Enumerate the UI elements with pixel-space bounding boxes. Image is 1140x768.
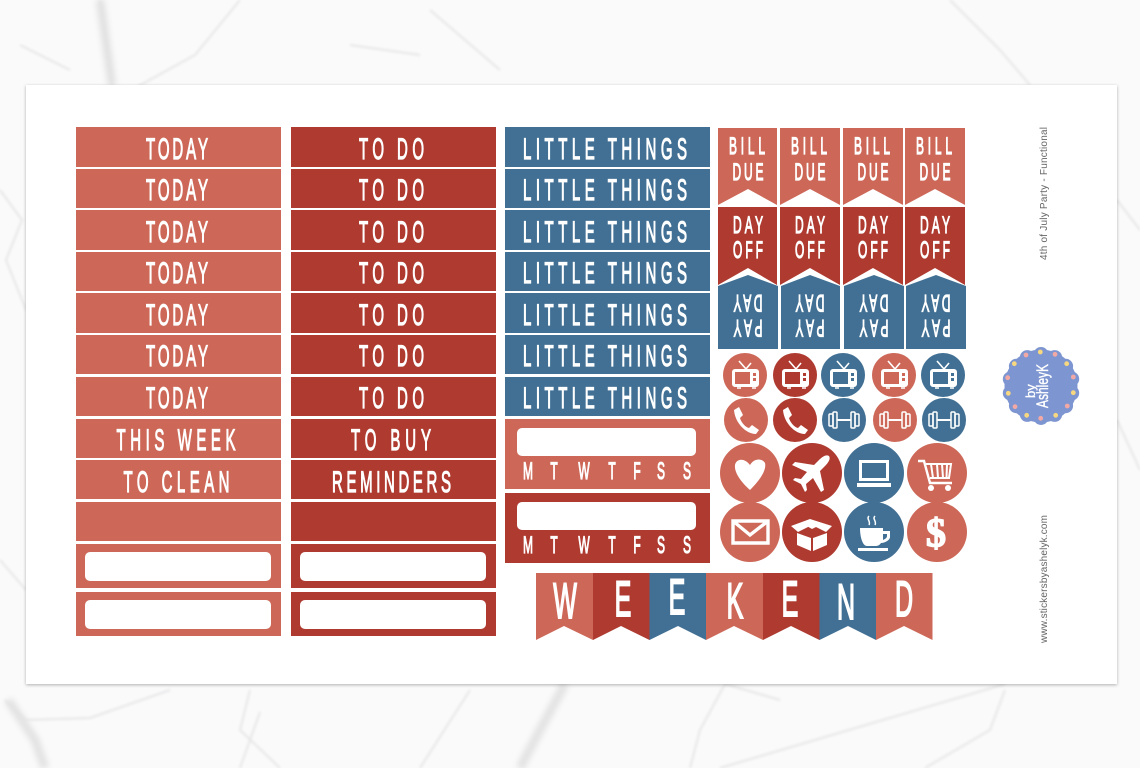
icon: shopping cart bbox=[907, 443, 967, 503]
sticker: TODAY 7: TODAY bbox=[146, 383, 208, 416]
sticker: TODAY 2: TODAY bbox=[146, 175, 208, 208]
flag: DAY OFF 1: DAY bbox=[733, 213, 763, 239]
flag: DAY OFF 1: OFF bbox=[733, 238, 763, 264]
flag: PAY DAY 3 (upside down): DAY bbox=[859, 289, 888, 315]
website URL, vertical: www.stickersbyashelyk.com bbox=[1039, 515, 1050, 644]
sticker: blank bbox=[76, 502, 281, 541]
sticker: TO CLEAN: TO CLEAN bbox=[123, 467, 230, 500]
pennant: K: K bbox=[727, 574, 743, 629]
weekday tracker: coral: T bbox=[550, 459, 558, 485]
weekday tracker: coral bbox=[505, 419, 710, 489]
weekday tracker: dark red: S bbox=[683, 533, 691, 559]
sticker: write-in box 2 bbox=[291, 592, 496, 636]
sticker: TO DO 7 bbox=[291, 377, 496, 416]
weekday tracker: coral: F bbox=[633, 459, 641, 485]
sticker: TODAY 4 bbox=[76, 252, 281, 291]
weekday tracker: dark red: M bbox=[523, 533, 533, 559]
sticker: TO DO 1 bbox=[291, 127, 496, 167]
pennant: D: D bbox=[895, 572, 913, 627]
flag: PAY DAY 3 (upside down) bbox=[844, 275, 904, 349]
flag: BILL DUE 2 bbox=[780, 128, 840, 205]
sticker: TO DO 1: TO DO bbox=[359, 134, 424, 167]
flag: PAY DAY 1 (upside down): PAY bbox=[733, 314, 762, 340]
flag: PAY DAY 2 (upside down): DAY bbox=[795, 289, 824, 315]
flag: PAY DAY 1 (upside down): DAY bbox=[733, 289, 762, 315]
sticker: TO DO 3 bbox=[291, 210, 496, 250]
pennant: E: E bbox=[615, 572, 631, 627]
sticker: THIS WEEK: THIS WEEK bbox=[116, 425, 236, 458]
sticker: TO DO 2: TO DO bbox=[359, 175, 424, 208]
sticker: LITTLE THINGS 5: LITTLE THINGS bbox=[523, 300, 687, 333]
icon: tv coral bbox=[872, 353, 916, 397]
sticker: TODAY 6: TODAY bbox=[146, 341, 208, 374]
sticker: REMINDERS bbox=[291, 460, 496, 500]
icon: envelope bbox=[720, 502, 780, 562]
sticker: write-in box 1 bbox=[291, 544, 496, 588]
pennant: W: W bbox=[553, 574, 577, 629]
flag: BILL DUE 1: DUE bbox=[732, 160, 764, 186]
weekday tracker: dark red: S bbox=[657, 533, 665, 559]
icon: tv blue bbox=[821, 353, 865, 397]
flag: BILL DUE 1 bbox=[718, 128, 777, 205]
sticker: LITTLE THINGS 1 bbox=[505, 127, 710, 167]
flag: PAY DAY 4 (upside down) bbox=[906, 275, 966, 349]
icon: dumbbell blue bbox=[822, 398, 866, 442]
sticker: REMINDERS: REMINDERS bbox=[332, 467, 451, 500]
column 3: blue header stickers and weekday trackers bbox=[505, 127, 710, 563]
pennant: E: E bbox=[669, 570, 685, 625]
sticker: TODAY 2 bbox=[76, 169, 281, 208]
weekday tracker: coral: S bbox=[683, 459, 691, 485]
sticker: LITTLE THINGS 2 bbox=[505, 169, 710, 208]
white sticker sheet bbox=[26, 85, 1117, 684]
badge: by AshleyK bbox=[1003, 347, 1079, 425]
sticker: LITTLE THINGS 3 bbox=[505, 210, 710, 250]
flag: BILL DUE 2: BILL bbox=[791, 134, 827, 160]
pennant: E bbox=[650, 570, 706, 640]
icon: dumbbell blue bbox=[922, 398, 966, 442]
sticker: LITTLE THINGS 4 bbox=[505, 252, 710, 291]
flag: PAY DAY 2 (upside down): PAY bbox=[795, 314, 824, 340]
flag: DAY OFF 1 bbox=[718, 207, 777, 285]
icon: tv blue bbox=[921, 353, 965, 397]
sticker: TO DO 6: TO DO bbox=[359, 341, 424, 374]
sticker: LITTLE THINGS 1: LITTLE THINGS bbox=[523, 134, 687, 167]
weekday tracker: coral: T bbox=[608, 459, 616, 485]
sticker: TODAY 5 bbox=[76, 293, 281, 333]
sheet title, vertical: 4th of July Party - Functional bbox=[1039, 127, 1050, 260]
sticker: blank bbox=[291, 502, 496, 541]
flag: DAY OFF 4 bbox=[905, 207, 965, 285]
flag: BILL DUE 3: BILL bbox=[854, 134, 890, 160]
flag: DAY OFF 2: DAY bbox=[795, 213, 825, 239]
flag: PAY DAY 4 (upside down): PAY bbox=[921, 314, 950, 340]
sticker: TO DO 6 bbox=[291, 335, 496, 374]
sticker: TO DO 7: TO DO bbox=[359, 383, 424, 416]
weekday tracker: coral: S bbox=[657, 459, 665, 485]
pennant: E bbox=[763, 572, 820, 640]
icon: tv dark red bbox=[773, 353, 817, 397]
weekday tracker: coral: M bbox=[523, 459, 533, 485]
sticker: TODAY 1: TODAY bbox=[146, 134, 208, 167]
sticker: LITTLE THINGS 6 bbox=[505, 335, 710, 374]
icon: dollar sign: $ bbox=[926, 510, 946, 555]
flag: DAY OFF 3: DAY bbox=[858, 213, 888, 239]
pennant: K bbox=[706, 573, 763, 640]
small circle icons bbox=[723, 353, 966, 442]
flag: DAY OFF 4: DAY bbox=[920, 213, 950, 239]
pennant: N bbox=[820, 573, 876, 640]
sticker: TODAY 6 bbox=[76, 335, 281, 374]
icon: coffee cup bbox=[844, 502, 904, 562]
flag: PAY DAY 4 (upside down): DAY bbox=[921, 289, 950, 315]
flag: PAY DAY 1 (upside down) bbox=[718, 275, 778, 349]
flag: PAY DAY 2 (upside down) bbox=[781, 275, 840, 349]
large circle icons bbox=[720, 443, 967, 562]
flag: DAY OFF 2 bbox=[780, 207, 840, 285]
sticker: TO DO 5 bbox=[291, 293, 496, 333]
sticker: LITTLE THINGS 5 bbox=[505, 293, 710, 333]
flag: BILL DUE 4: BILL bbox=[916, 134, 952, 160]
sticker: TO DO 4 bbox=[291, 252, 496, 291]
weekday tracker: dark red: W bbox=[578, 533, 590, 559]
sticker: LITTLE THINGS 7: LITTLE THINGS bbox=[523, 383, 687, 416]
sticker: TO DO 5: TO DO bbox=[359, 300, 424, 333]
sticker: write-in box 2 bbox=[76, 592, 281, 636]
flag: DAY OFF 3: OFF bbox=[858, 238, 888, 264]
flag: DAY OFF 2: OFF bbox=[795, 238, 825, 264]
weekday tracker: coral: W bbox=[578, 459, 590, 485]
pennant: E: E bbox=[782, 572, 798, 627]
sticker: TODAY 7 bbox=[76, 377, 281, 416]
icon: tv coral bbox=[723, 353, 767, 397]
sticker: LITTLE THINGS 2: LITTLE THINGS bbox=[523, 175, 687, 208]
sticker: LITTLE THINGS 4: LITTLE THINGS bbox=[523, 258, 687, 291]
weekday tracker: dark red: F bbox=[633, 533, 641, 559]
column 1: coral header stickers bbox=[76, 127, 281, 636]
sticker: TODAY 5: TODAY bbox=[146, 300, 208, 333]
icon: heart bbox=[720, 443, 780, 503]
flag: DAY OFF 4: OFF bbox=[920, 238, 950, 264]
flag: BILL DUE 1: BILL bbox=[729, 134, 765, 160]
flag: BILL DUE 4 bbox=[905, 128, 965, 205]
pennant: E bbox=[593, 572, 650, 640]
flag: BILL DUE 3: DUE bbox=[858, 160, 888, 186]
pennant: N: N bbox=[837, 575, 855, 630]
sticker: TO BUY bbox=[291, 419, 496, 458]
sticker: TO DO 4: TO DO bbox=[359, 258, 424, 291]
icon: dumbbell coral bbox=[873, 398, 917, 442]
sticker: TO DO 2 bbox=[291, 169, 496, 208]
flag: PAY DAY 3 (upside down): PAY bbox=[859, 314, 888, 340]
sticker: write-in box 1 bbox=[76, 544, 281, 588]
icon: dollar sign bbox=[907, 502, 967, 562]
flag: BILL DUE 3 bbox=[843, 128, 903, 205]
sticker: LITTLE THINGS 3: LITTLE THINGS bbox=[523, 217, 687, 250]
flag stickers: BILL DUE, DAY OFF, PAY DAY bbox=[718, 128, 966, 349]
icon: phone dark red bbox=[773, 398, 817, 442]
icon: phone coral bbox=[724, 398, 768, 442]
flag: BILL DUE 4: DUE bbox=[920, 160, 950, 186]
icon: laptop bbox=[844, 443, 904, 503]
sticker: LITTLE THINGS 6: LITTLE THINGS bbox=[523, 341, 687, 374]
sticker: LITTLE THINGS 7 bbox=[505, 377, 710, 416]
sticker: THIS WEEK bbox=[76, 419, 281, 458]
badge: by AshleyK: by bbox=[1023, 384, 1038, 398]
badge: by AshleyK: AshleyK bbox=[1033, 364, 1052, 408]
weekday tracker: dark red bbox=[505, 493, 710, 563]
pennant: D bbox=[876, 572, 932, 640]
sticker: TODAY 4: TODAY bbox=[146, 258, 208, 291]
sticker: TO CLEAN bbox=[76, 460, 281, 500]
icon: open box bbox=[782, 502, 842, 562]
weekday tracker: dark red: T bbox=[608, 533, 616, 559]
pennant: W bbox=[536, 573, 593, 640]
icon: airplane bbox=[782, 443, 842, 503]
flag: BILL DUE 2: DUE bbox=[794, 160, 826, 186]
sticker: TO BUY: TO BUY bbox=[351, 425, 431, 458]
flag: DAY OFF 3 bbox=[843, 207, 903, 285]
sticker: TODAY 1 bbox=[76, 127, 281, 167]
sticker: TODAY 3: TODAY bbox=[146, 217, 208, 250]
sticker: TODAY 3 bbox=[76, 210, 281, 250]
WEEKEND banner bbox=[536, 570, 932, 640]
sticker: TO DO 3: TO DO bbox=[359, 217, 424, 250]
weekday tracker: dark red: T bbox=[550, 533, 558, 559]
column 2: dark red header stickers bbox=[291, 127, 496, 636]
